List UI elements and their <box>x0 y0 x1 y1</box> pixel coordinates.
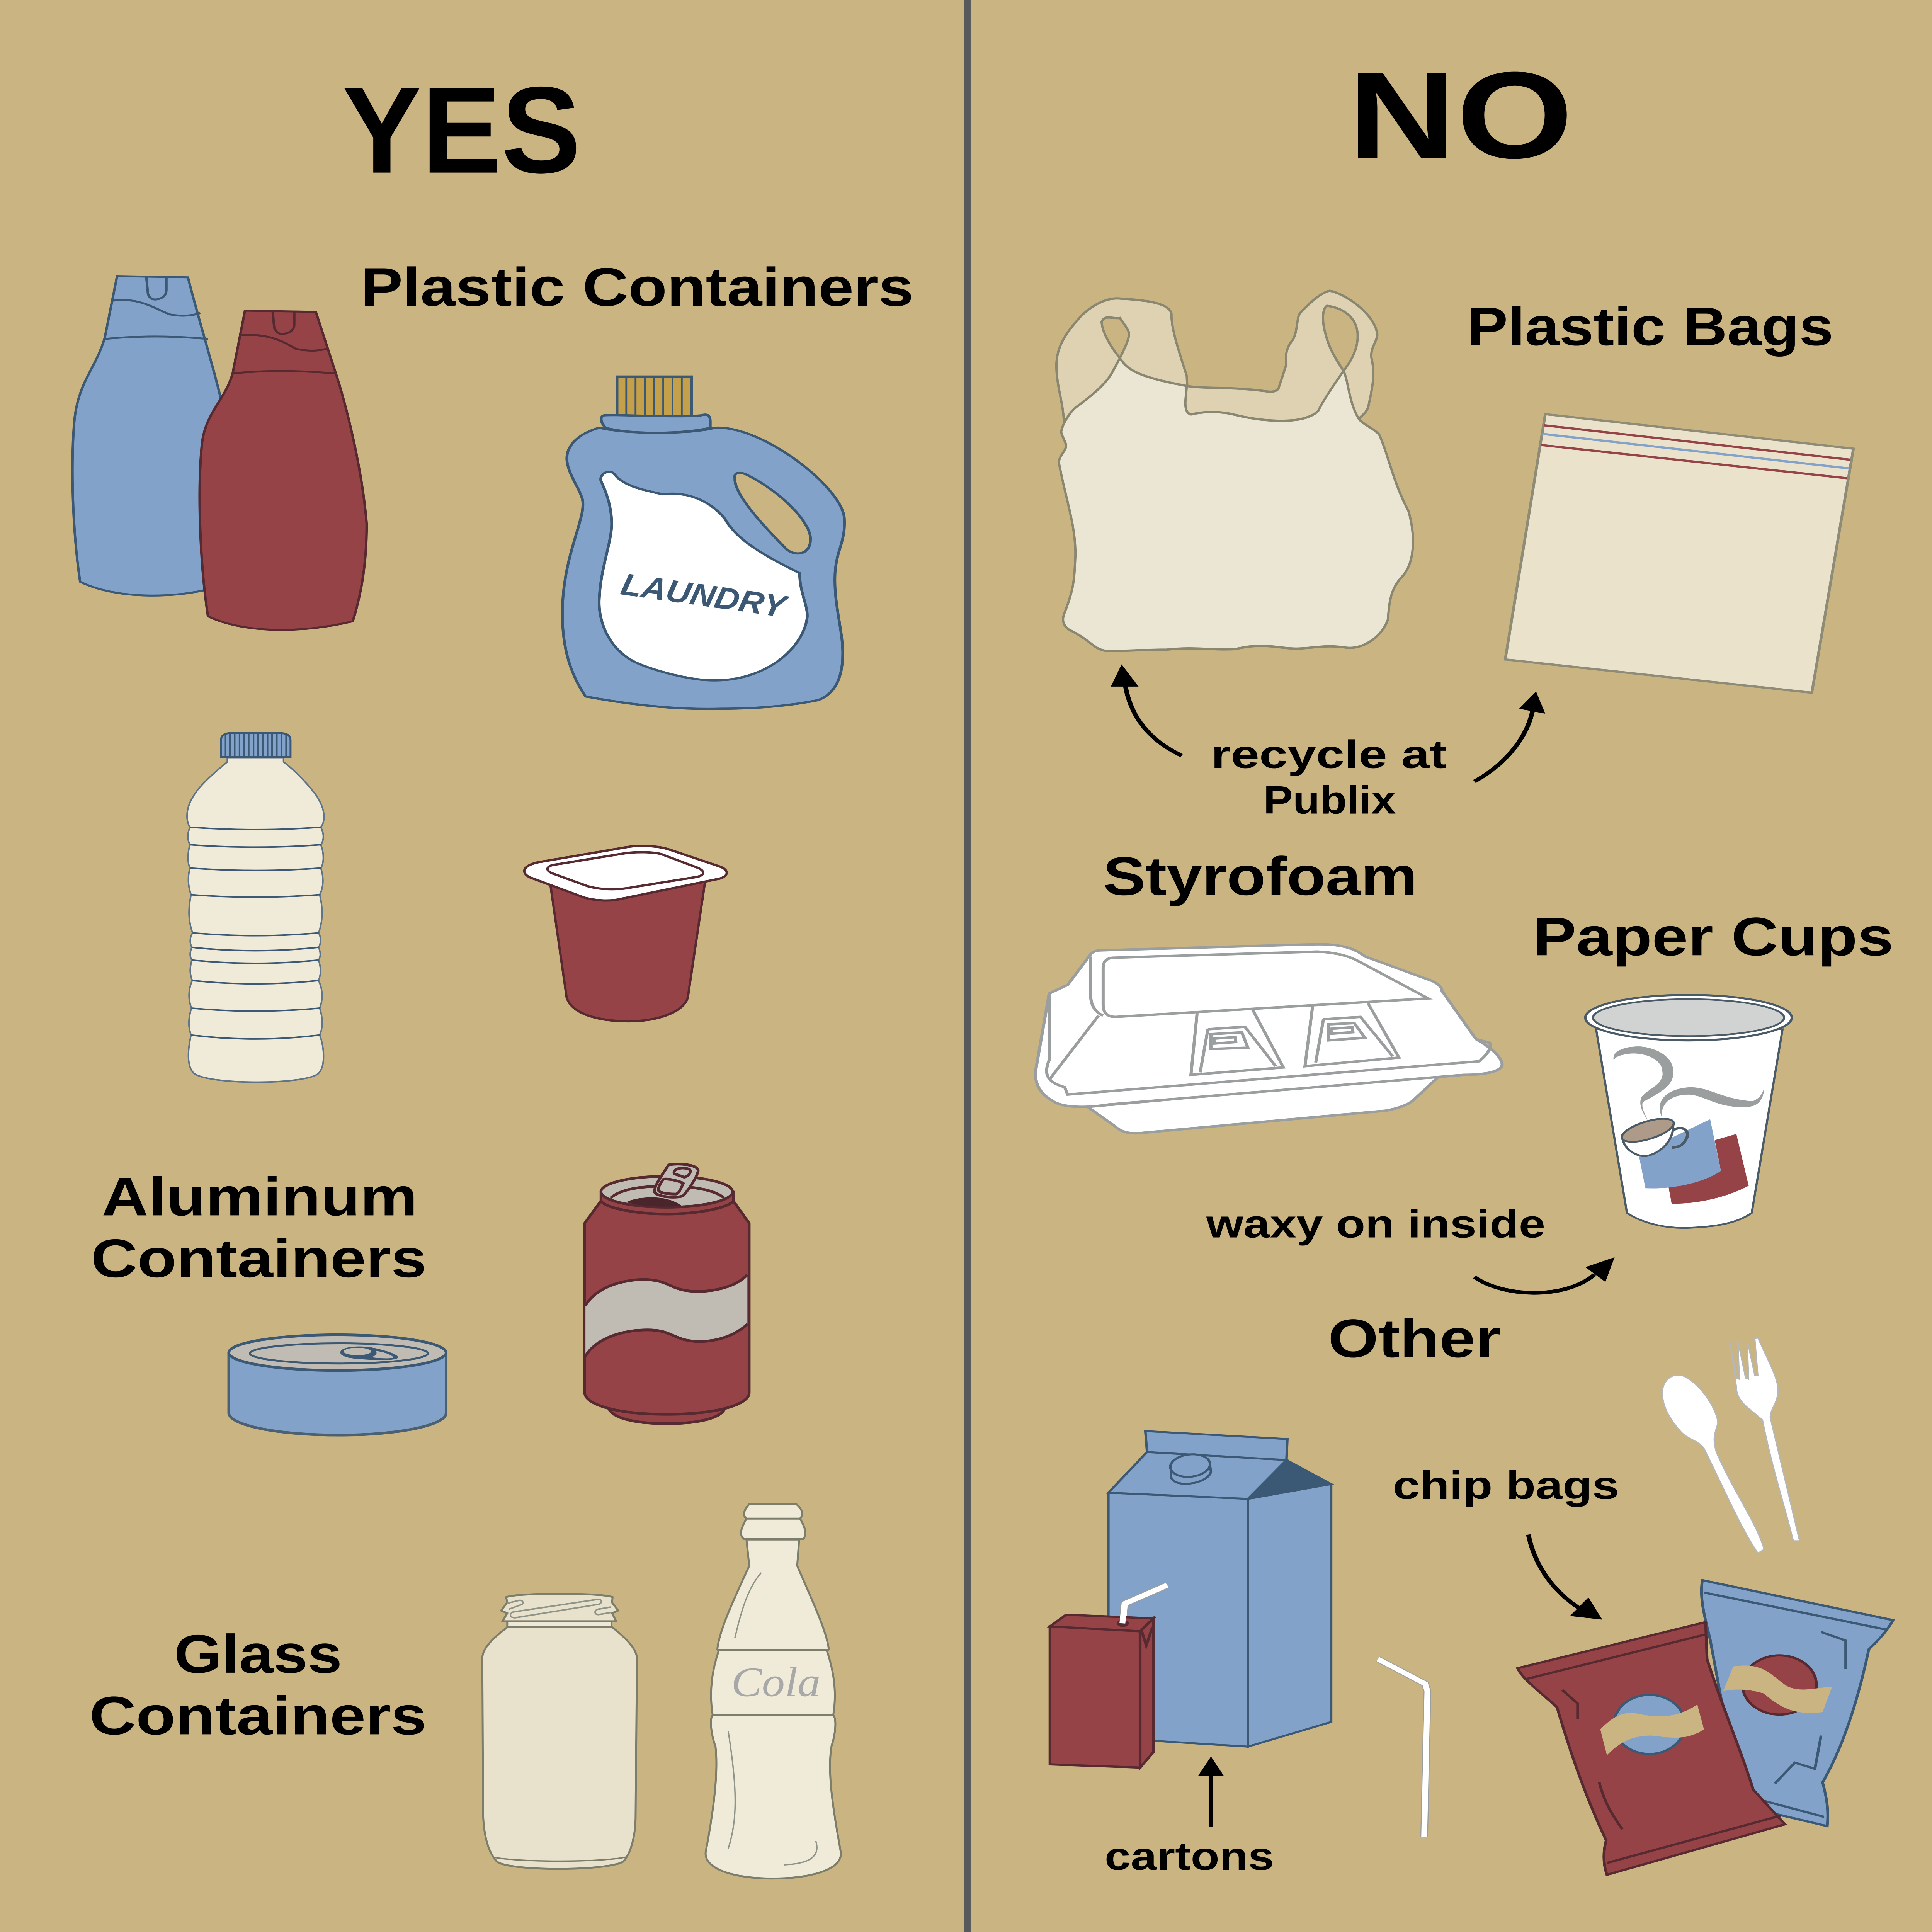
icon: zip-lock bag <box>1505 414 1854 693</box>
arrow: to paper cup <box>1475 1257 1615 1293</box>
icon: styrofoam takeout box <box>1035 944 1502 1133</box>
icon: red shampoo bottle <box>200 311 367 630</box>
heading: Styrofoam: Styrofoam <box>1103 846 1417 906</box>
heading: YES: YES <box>342 61 581 199</box>
icon: plastic spoon <box>1662 1375 1764 1553</box>
icon: soda can <box>585 1164 749 1423</box>
icon: glass jar <box>482 1594 637 1869</box>
icon: cola bottle <box>706 1504 841 1879</box>
heading: Paper Cups: Paper Cups <box>1533 906 1893 967</box>
heading: Glass Containers: Glass <box>174 1624 342 1684</box>
label: LAUNDRY: LAUNDRY <box>618 567 792 624</box>
icon: milk carton <box>1108 1431 1331 1747</box>
icon: red chip bag <box>1517 1622 1785 1875</box>
icon: paper coffee cup <box>1585 995 1792 1228</box>
note: chip bags: chip bags <box>1393 1463 1619 1507</box>
heading: Glass Containers <box>89 1624 427 1746</box>
icon: blue shampoo bottle <box>73 276 228 595</box>
arrow: to zip-lock bag <box>1475 692 1545 781</box>
heading: Other: Other <box>1328 1308 1501 1369</box>
arrow: to cartons <box>1198 1757 1224 1827</box>
label: Cola: Cola <box>731 1659 821 1705</box>
icon: laundry detergent jug <box>562 377 844 709</box>
icon: juice box with straw <box>1050 1585 1167 1767</box>
icon: yogurt cup <box>524 846 727 1021</box>
icon: blue chip bag <box>1701 1580 1893 1826</box>
arrow: to chip bags <box>1528 1535 1602 1620</box>
heading: Aluminum Containers: Aluminum <box>102 1166 418 1227</box>
note: waxy on inside: waxy on inside <box>1206 1202 1545 1246</box>
note: cartons: cartons <box>1105 1834 1274 1878</box>
icon: plastic fork <box>1730 1338 1799 1541</box>
note: recycle at Publix: recycle at <box>1211 732 1447 776</box>
icon: water bottle <box>187 733 324 1082</box>
heading: Glass Containers: Containers <box>89 1685 427 1746</box>
note: recycle at Publix <box>1211 732 1447 822</box>
icon: plastic shopping bag <box>1056 291 1413 651</box>
heading: Aluminum Containers: Containers <box>91 1228 427 1289</box>
heading: Aluminum Containers <box>91 1166 427 1289</box>
heading: Plastic Containers: Plastic Containers <box>361 257 913 317</box>
icon: bendy straw <box>1378 1659 1427 1837</box>
arrow: to plastic bag <box>1111 664 1182 755</box>
icon: tuna tin <box>229 1335 446 1435</box>
heading: Plastic Bags: Plastic Bags <box>1467 296 1833 357</box>
heading: NO: NO <box>1348 46 1573 184</box>
note: recycle at Publix: Publix <box>1264 778 1396 822</box>
